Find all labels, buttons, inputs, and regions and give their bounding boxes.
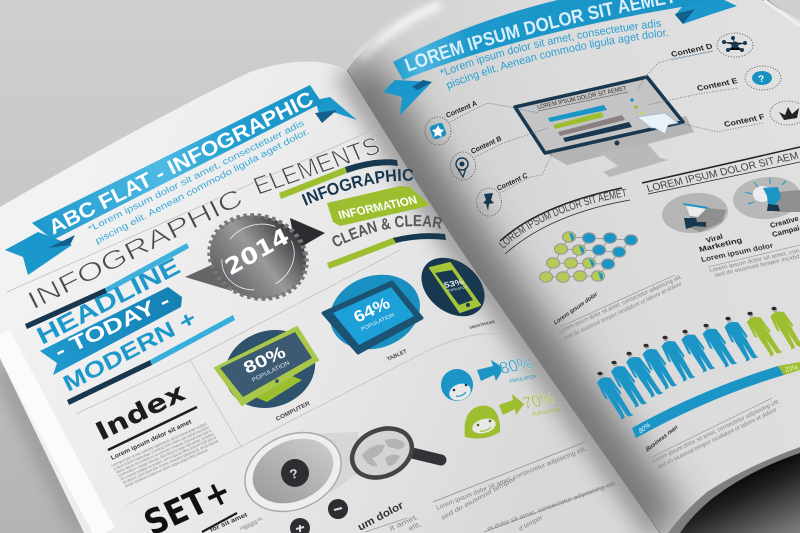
icon: computer 80% <box>214 318 326 423</box>
pictogram row of business men <box>594 307 800 420</box>
business man caption: Business man <box>645 424 678 454</box>
index block: Lorem ipsum dolor sit amet, consectetur adipisicing elit, sed do eiusmod tempor incididunt <box>110 421 208 468</box>
icon: computer 80%: 80% <box>240 342 289 377</box>
heading: Infographic Elements: ELEMENTS <box>249 131 384 200</box>
viral and creative labels: Lorem ipsum dolor <box>700 241 774 264</box>
headline block: HEADLINE <box>33 253 184 350</box>
viral and creative labels: Marketing <box>698 236 744 254</box>
index block: tempor incididunt ut labore et dolore magna aliqua officia deserunt <box>124 447 209 488</box>
content C <box>476 171 529 216</box>
title ribbon: ABC Flat Infographic <box>5 85 357 275</box>
content F <box>723 101 800 129</box>
monitor illustration: LOREM IPSUM DOLOR SIT AEMET <box>536 85 628 111</box>
left magazine page <box>0 61 660 533</box>
stat: blue boy face 80% <box>441 353 537 403</box>
stat: green girl face 70%: POPULATION <box>532 407 561 418</box>
heading: Infographic Elements <box>23 131 384 315</box>
icon: phone 53% <box>410 246 496 330</box>
left page text block two: d tempor <box>518 514 544 533</box>
content C: Content C <box>496 171 529 193</box>
content E: Content E <box>696 76 739 93</box>
icon: tablet 64%: POPULATION <box>360 313 396 333</box>
heading: Infographic Elements: INFOGRAPHIC <box>23 183 247 315</box>
left page text block one: Lorem ipsum dolor sit amet, consectetur adipisicing elit, <box>435 446 588 512</box>
right title ribbon <box>383 0 737 115</box>
icon: tablet 64%: 64% <box>351 294 393 326</box>
right intro text: *Lorem ipsum dolor sit amet, consectetuer adis <box>440 19 661 76</box>
viral and creative labels <box>698 214 800 279</box>
business man caption: Lorem ipsum dolor sit amet, consectetur adipisicing elit, <box>651 398 781 465</box>
stacked labels: Infographic, Information, Clean and Clear: CLEAN & CLEAR <box>332 215 442 246</box>
content D <box>670 33 753 59</box>
icon: computer 80%: POPULATION <box>251 360 291 384</box>
badge 2014 <box>185 211 325 303</box>
left page text block two: m dolor sit amet, consectetur adipisicing elit, <box>486 480 618 533</box>
left intro text <box>87 118 311 247</box>
index block: Index <box>91 378 190 447</box>
small text block: Lorem ipsum dolor: elit, <box>407 520 423 533</box>
viral and creative labels: sed do eiusmod tempor incidid <box>713 253 800 279</box>
network chart <box>540 232 638 282</box>
content D: Content D <box>670 42 714 59</box>
set plus block: adipisicing elit, <box>238 515 264 531</box>
headline block: - TODAY - <box>51 288 174 363</box>
stacked labels: Infographic, Information, Clean and Clear: INFOGRAPHIC <box>302 168 414 206</box>
dotted connectors <box>450 51 763 193</box>
index block: ut labore et dolore magna aliqua. Ut enim ad minim veniam, quis nostrud exercitation <box>113 425 210 471</box>
headline block <box>25 243 235 405</box>
icon: phone 53%: SMARTPHONE <box>469 319 496 330</box>
business man caption: sed do eiusmod tempor incididunt ut labore et dolore <box>656 406 778 471</box>
headline block: MODERN + <box>60 306 200 397</box>
content E <box>696 66 781 93</box>
index block <box>91 378 219 488</box>
shadow beside magazine left edge <box>0 365 84 533</box>
index block: Lorem ipsum dolor sit amet <box>110 418 193 462</box>
shadow under magazine at bottom right <box>655 444 800 533</box>
content B: Content B <box>470 134 503 156</box>
stat: blue boy face 80%: 80% <box>497 353 535 378</box>
stacked labels: Infographic, Information, Clean and Clear: INFORMATION <box>337 193 419 222</box>
stat: blue boy face 80%: POPULATION <box>509 374 537 385</box>
network caption: Lorem ipsum dolor sit amet, consectetur adipisicing elit, <box>558 273 683 335</box>
right magazine page <box>347 0 800 533</box>
creative campaign icon <box>731 174 800 222</box>
network caption: Lorem ipsum dolor <box>553 291 599 327</box>
monitor illustration <box>515 77 694 177</box>
icon: tablet 64% <box>319 262 431 363</box>
small text block: Lorem ipsum dolor: it amet, <box>388 512 420 533</box>
content E: ? <box>757 74 766 85</box>
index block: sint occaecat cupidatat non proident, sunt in culpa qui officia deserunt mollit anim id <box>120 435 217 481</box>
stat: green girl face 70%: 70% <box>520 389 558 413</box>
index block: ullamco laboris nisi ut aliquip ex ea commodo consequat. Duis aute irure dolor in <box>115 428 212 475</box>
progress bar 80 / 20 <box>632 362 800 438</box>
content A <box>425 98 478 145</box>
icon: phone 53%: 53% <box>442 277 466 290</box>
right intro text: piscing elit. Aenean commodo ligula aget dolor. <box>446 30 668 91</box>
badge 2014: 2014 <box>221 222 293 281</box>
magnifier illustration <box>232 418 441 533</box>
network caption: sed do eiusmod tempor incididunt ut labore et dolore <box>563 280 683 342</box>
small text block: Lorem ipsum dolor: um dolor <box>356 500 406 533</box>
thin dividers on left page <box>7 128 505 505</box>
icon: tablet 64%: TABLET <box>386 349 408 363</box>
stat: green girl face 70% <box>465 389 561 439</box>
content A: Content A <box>445 98 478 120</box>
left intro text: *Lorem ipsum dolor sit amet, consectetuer adis <box>87 118 306 235</box>
left section header: LOREM IPSUM DOLOR SIT AEMET <box>498 188 626 248</box>
content F: Content F <box>723 113 766 129</box>
left intro text: piscing elit. Aenean commodo ligula aget dolor. <box>94 126 311 247</box>
set plus block: tempor <box>243 520 259 531</box>
index block: est laborum. Lorem ipsum dolor sit amet, consectetur adipisicing elit, sed do eiusmod <box>122 438 219 485</box>
magnifier illustration: ? <box>288 466 300 482</box>
left page text block one: sed do eiusmod tempor <box>440 475 517 522</box>
icon: phone 53%: POPULATION <box>447 285 468 293</box>
stacked labels: Infographic, Information, Clean and Clear <box>279 159 446 269</box>
icon: computer 80%: COMPUTER <box>275 400 312 423</box>
index block: reprehenderit in voluptate velit esse cillum dolore eu fugiat nulla pariatur. Excepteur <box>117 432 215 478</box>
title ribbon: ABC Flat Infographic: ABC FLAT - INFOGRAPHIC <box>45 86 317 239</box>
viral and creative labels: Viral <box>705 232 724 245</box>
content B <box>450 134 503 180</box>
viral marketing icon <box>660 190 730 236</box>
viral and creative labels: Lorem ipsum dolor sit amet, con <box>708 248 800 274</box>
progress bar 80 / 20: 80% <box>638 420 651 436</box>
